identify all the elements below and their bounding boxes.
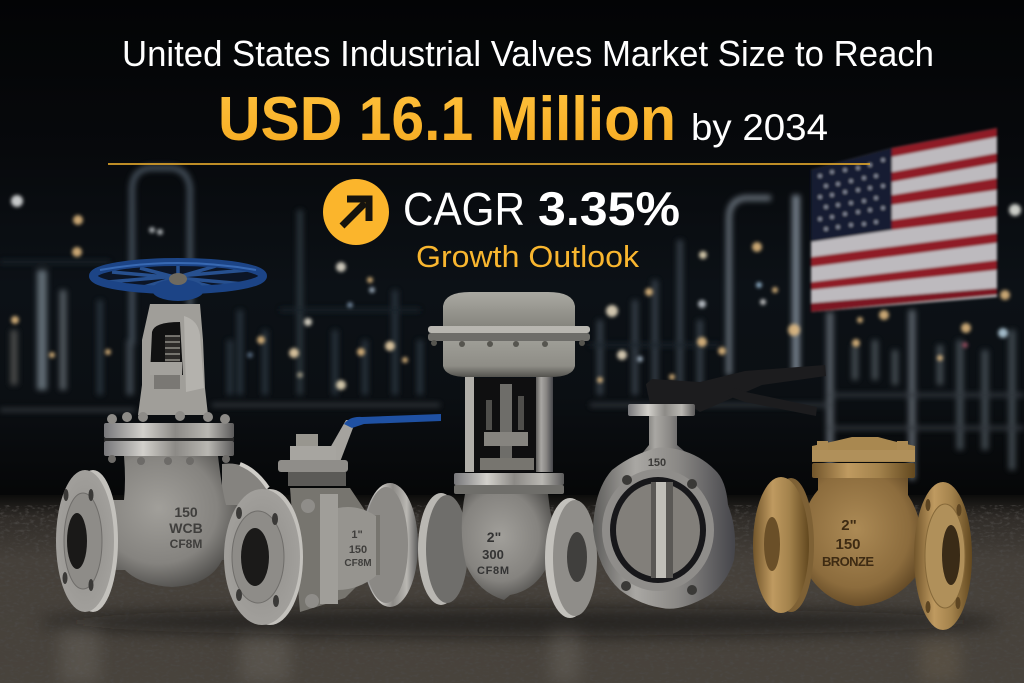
lever [322,420,356,462]
left flange [768,478,814,612]
US flag [811,128,997,312]
bokeh lights [11,195,1021,390]
valve: gate valve with blue handwheel: 150 [174,504,198,520]
CAGR figure: 3.35% [538,182,680,235]
valve: ball valve with blue lever [224,414,441,625]
valve: butterfly valve with lever [593,365,826,609]
body [100,456,240,587]
headline: market size: by 2034 [691,107,828,148]
body [803,478,921,606]
valve: gate valve with blue handwheel: CF8M [170,537,202,551]
valve: ball valve with blue lever: 1" [351,529,363,541]
back flange [362,483,418,607]
valve: control valve with actuator: CF8M [477,565,509,577]
bonnet flange [104,423,234,438]
yoke flange [454,473,564,485]
valve: control valve with actuator [418,292,597,618]
actuator [443,292,575,328]
icon: growth arrow [323,179,389,245]
black lever [646,365,826,412]
valve: gate valve with blue handwheel [56,262,268,612]
valve: ball valve with blue lever: CF8M [344,558,372,569]
stem stack [296,434,318,448]
left flange [68,470,118,612]
valve: ball valve with blue lever: 150 [349,544,367,556]
right flange [545,498,595,618]
body [290,488,380,612]
valve: bronze swing check valve: BRONZE [822,554,874,569]
valve: butterfly valve with lever: 150 [648,457,666,469]
valve: gate valve with blue handwheel: WCB [169,520,203,536]
yoke [473,378,536,472]
bonnet [812,437,915,462]
body [462,494,554,600]
floor [0,495,1024,683]
valve: bronze swing check valve [753,437,972,630]
title: United States Industrial Valves Market Size to Reach [122,33,934,74]
back right flange [222,464,268,530]
valve: control valve with actuator: 2" [487,529,501,545]
CAGR figure [403,182,680,235]
headline: market size: USD 16.1 Million [218,85,676,154]
front flange [237,489,303,625]
valve: bronze swing check valve: 150 [835,536,861,553]
valve: bronze swing check valve: 2" [841,517,857,534]
right flange [914,482,972,630]
gold divider [108,163,870,165]
pipes and columns [0,168,1024,480]
yoke [138,304,208,415]
CAGR figure: CAGR [403,183,525,235]
left flange [418,493,464,605]
growth outlook label: Growth Outlook [416,239,640,274]
valve: control valve with actuator: 300 [482,547,504,562]
wafer body [593,448,735,609]
handwheel [93,262,263,301]
